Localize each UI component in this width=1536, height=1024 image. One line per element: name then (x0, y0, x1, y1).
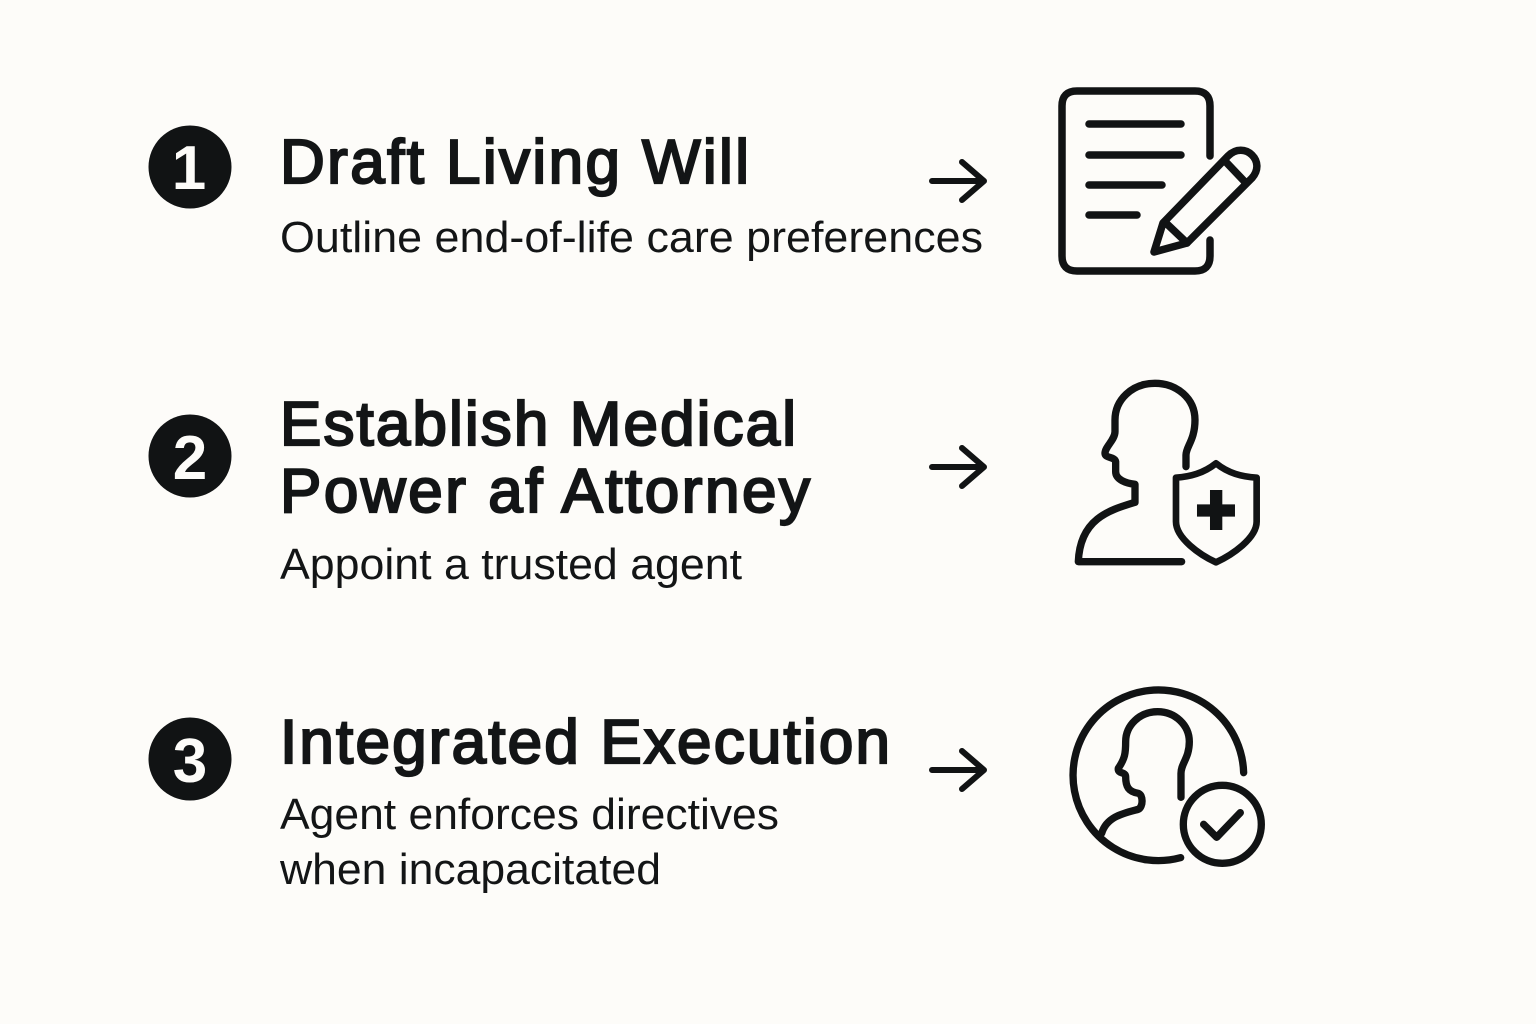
icon: person in circle with check mark (1073, 690, 1261, 863)
step 3 number badge: 3 (173, 727, 207, 796)
step 2 heading: Power af Attorney (280, 457, 810, 526)
step 1 description: Outline end-of-life care preferences (280, 213, 983, 262)
step 3 heading: Integrated Execution (280, 708, 890, 777)
step 2 number badge: 2 (173, 424, 207, 493)
step 2 heading (280, 390, 810, 526)
arrow 2 (932, 448, 984, 486)
step 3 description: Agent enforces directives (280, 790, 779, 839)
step 3 description: when incapacitated (279, 845, 661, 894)
step 2 number badge (148, 414, 232, 498)
step 2 heading: Establish Medical (280, 390, 796, 459)
step 3 number badge (148, 718, 232, 800)
arrow 3 (932, 751, 984, 789)
step 2 description: Appoint a trusted agent (280, 540, 742, 589)
icon: person with medical shield (1078, 383, 1257, 562)
step 1 heading: Draft Living Will (280, 128, 749, 197)
step 1 number badge (148, 126, 232, 208)
arrow 1 (932, 162, 984, 200)
icon: document with pencil (1062, 91, 1257, 271)
step 3 description (279, 790, 779, 894)
step 1 number badge: 1 (172, 134, 206, 203)
